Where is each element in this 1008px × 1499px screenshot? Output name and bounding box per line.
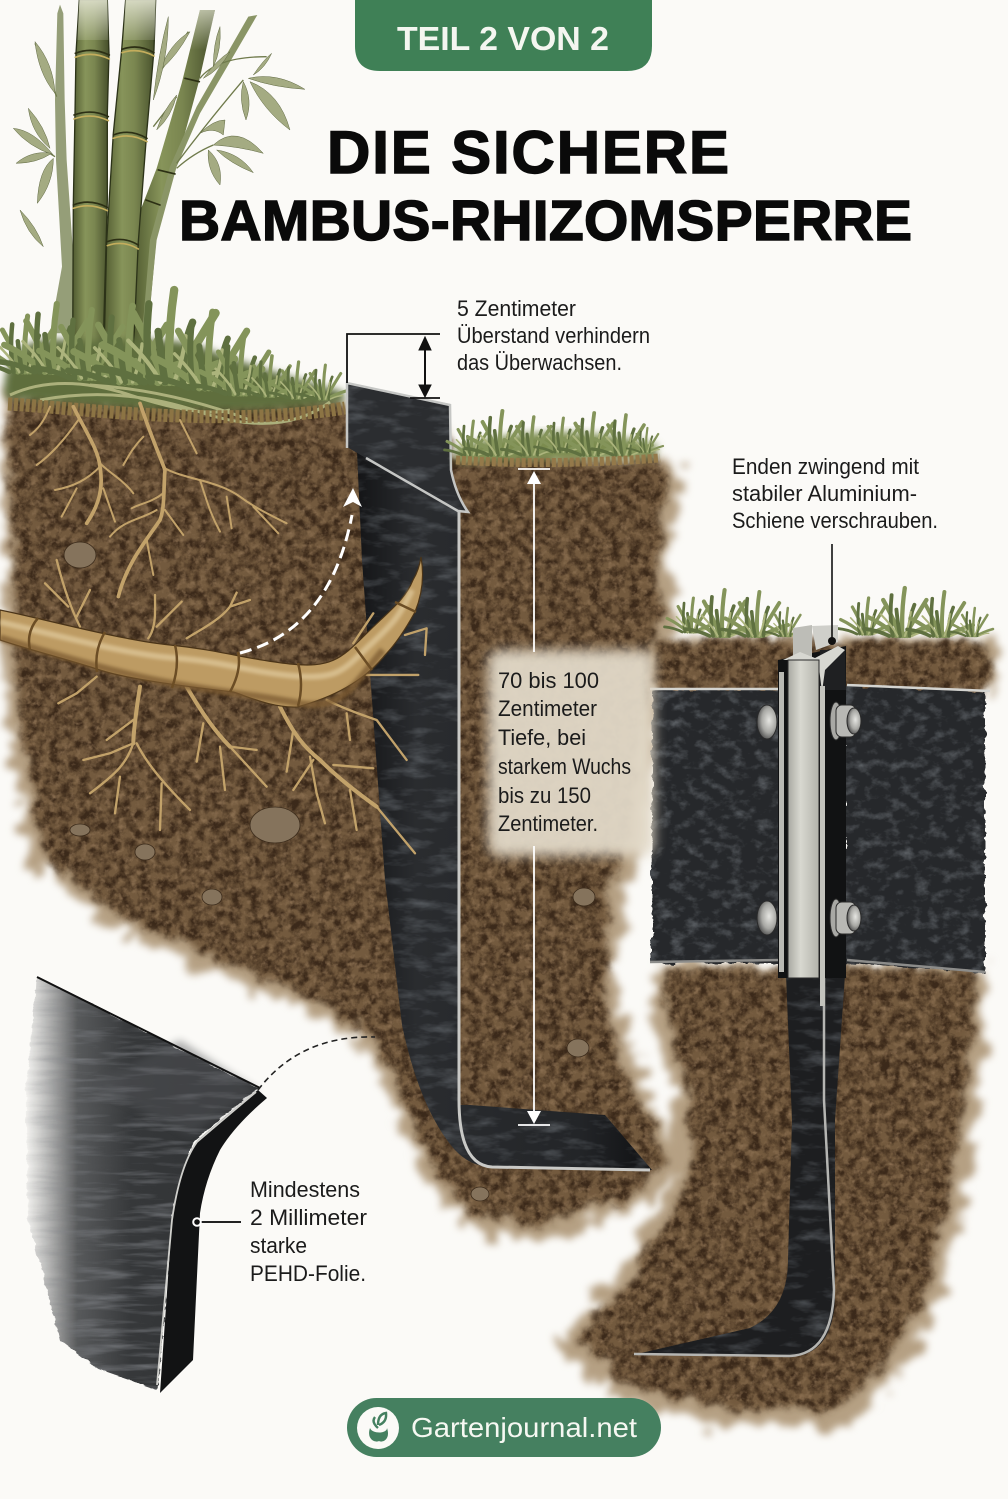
callout: depth 70 to 100 cm: Tiefe, bei <box>498 725 586 750</box>
nodes <box>73 47 199 249</box>
main stem A <box>73 0 109 353</box>
callout: 5 cm overhang <box>347 296 650 398</box>
callout: 5 cm overhang: das Überwachsen. <box>457 350 622 375</box>
title: BAMBUS-RHIZOMSPERRE <box>179 189 912 253</box>
stones <box>64 542 595 1201</box>
rail top <box>793 625 812 658</box>
joint detail: two barrier sheets <box>650 685 990 972</box>
callout: aluminium rail: Schiene verschrauben. <box>732 508 938 533</box>
soil cross-section: main trench <box>0 395 688 1242</box>
grass: joint detail <box>664 588 993 636</box>
joint detail: lower sheet in the ground <box>632 975 845 1357</box>
inset: PEHD foil close-up <box>26 977 267 1393</box>
thin left stem <box>50 5 74 333</box>
rhizome <box>0 557 423 707</box>
callout: aluminium rail <box>732 454 938 645</box>
icon: sprout with apple <box>357 1407 399 1449</box>
title: DIE SICHERE <box>327 119 729 186</box>
bolts <box>757 702 861 937</box>
callout: 5 cm overhang: Überstand verhindern <box>457 323 650 348</box>
callout: depth 70 to 100 cm: Zentimeter <box>498 696 597 721</box>
callout: aluminium rail: stabiler Aluminium- <box>732 481 917 506</box>
callout: depth 70 to 100 cm: bis zu 150 <box>498 783 591 808</box>
arrow: rhizome growing over the barrier <box>240 488 362 653</box>
callout: 2 mm foil: PEHD-Folie. <box>250 1261 366 1286</box>
logo pill: Gartenjournal.net: Gartenjournal.net <box>411 1412 637 1443</box>
badge: part 2 of 2: TEIL 2 VON 2 <box>397 20 609 57</box>
soil cross-section: joint detail <box>555 640 995 1430</box>
barrier sheet: cross-section <box>347 383 652 1170</box>
callout: depth 70 to 100 cm: starkem Wuchs <box>498 754 631 779</box>
sheet edge highlight <box>459 512 650 1170</box>
callout: 2 mm foil: Mindestens <box>250 1177 360 1202</box>
sheet body <box>357 452 652 1170</box>
callout: 2 mm foil: 2 Millimeter <box>250 1205 367 1230</box>
grass: bamboo clump <box>0 290 348 423</box>
root system <box>30 403 427 853</box>
callout: depth 70 to 100 cm: Zentimeter. <box>498 811 598 836</box>
main stem B <box>104 0 156 353</box>
logo pill: Gartenjournal.net <box>347 1398 661 1457</box>
aluminium rail with bolts <box>757 625 861 1006</box>
top flap <box>347 383 470 513</box>
callout: aluminium rail: Enden zwingend mit <box>732 454 919 479</box>
rail body <box>788 660 819 978</box>
title <box>179 119 912 253</box>
grass: right of the barrier <box>444 411 663 463</box>
callout: 5 cm overhang: 5 Zentimeter <box>457 296 576 321</box>
callout: depth 70 to 100 cm <box>488 469 654 1125</box>
callout: 2 mm foil <box>193 1037 375 1286</box>
badge: part 2 of 2 <box>355 0 652 71</box>
callout: 2 mm foil: starke <box>250 1233 307 1258</box>
callout: depth 70 to 100 cm: 70 bis 100 <box>498 668 599 693</box>
branches and leaves <box>28 32 267 168</box>
far right stem <box>133 10 215 347</box>
bamboo plant <box>13 0 305 353</box>
